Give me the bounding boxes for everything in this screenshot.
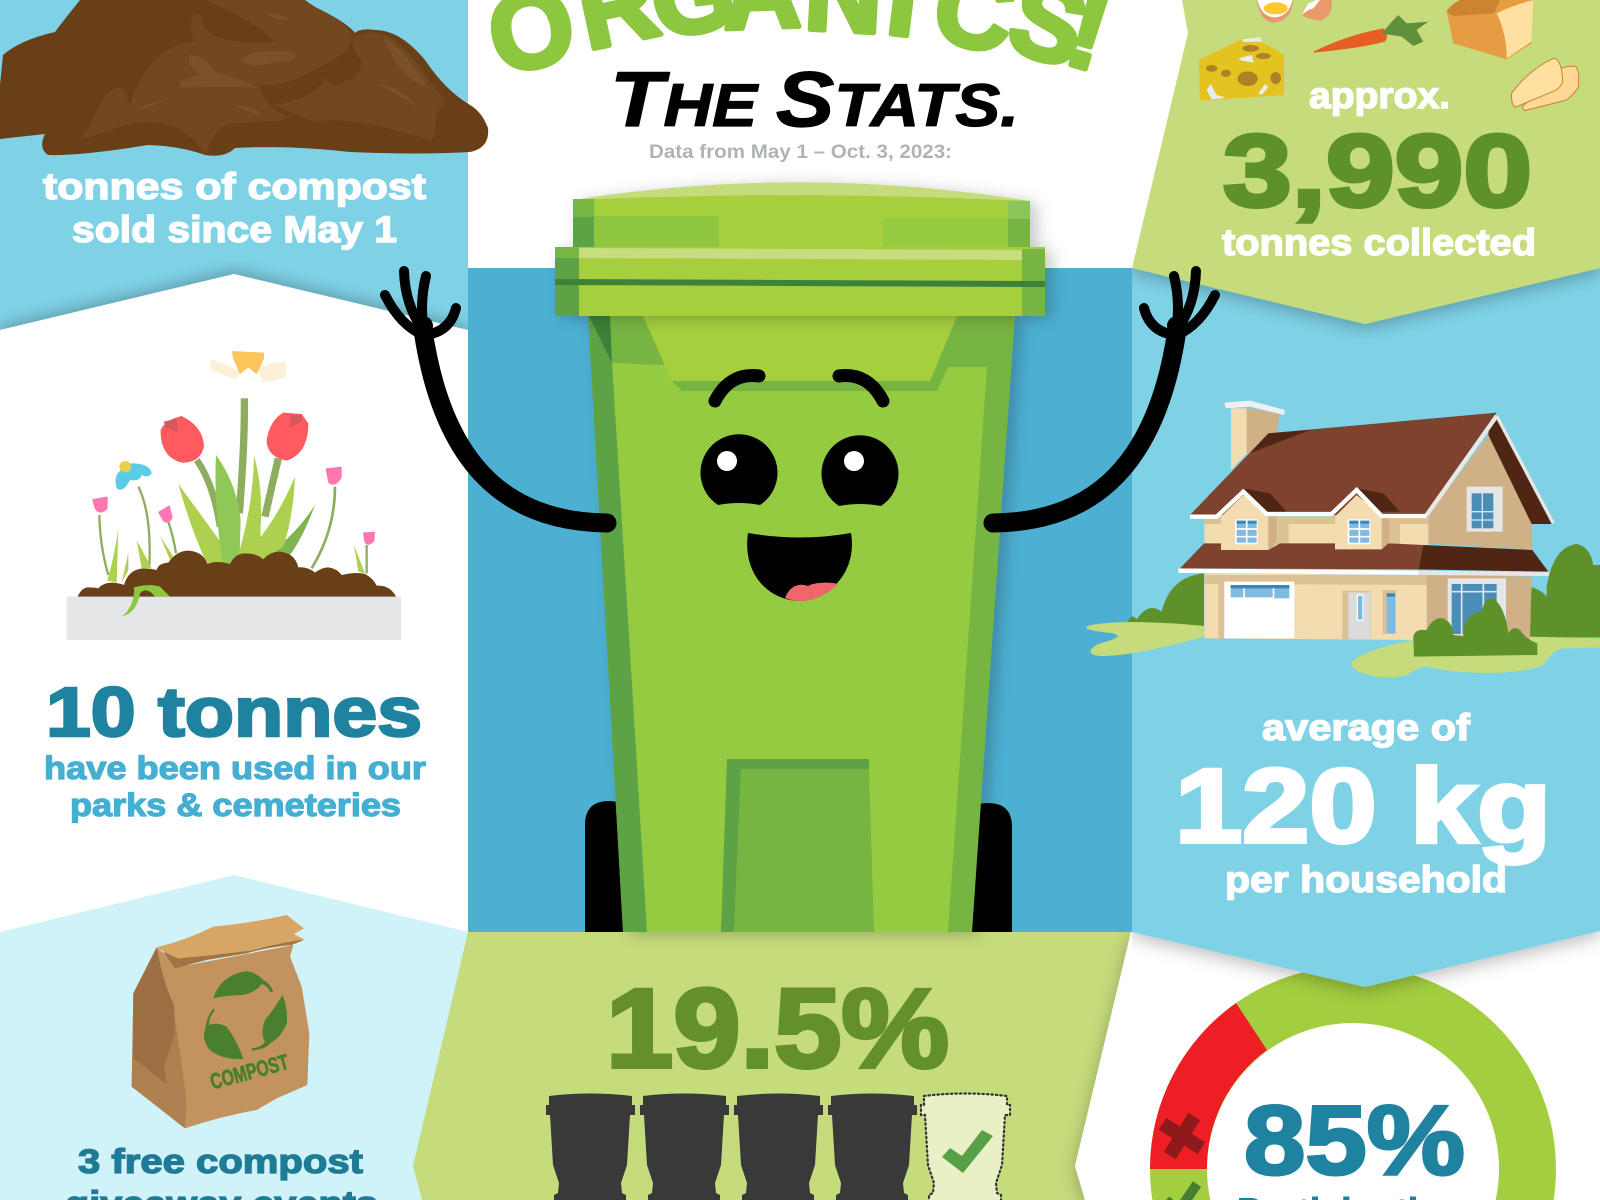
- illustration: food scraps: [1199, 0, 1579, 111]
- ground floor: [1178, 571, 1549, 640]
- bushes and lawn behind: [1086, 544, 1600, 677]
- planter box: [67, 597, 401, 640]
- text: compost label: COMPOST: [207, 1049, 292, 1094]
- panel: parks and cemeteries background: [0, 264, 468, 340]
- bin body: [588, 314, 1015, 932]
- text: tonnes of compost sold: [43, 166, 426, 250]
- pictogram: bins row: [546, 1094, 1010, 1200]
- bin door: [721, 759, 869, 932]
- dormers: [1190, 488, 1427, 550]
- eyebrows: [715, 376, 883, 401]
- front shrub: [1413, 598, 1537, 657]
- text: tonnes of compost sold: tonnes of compost: [43, 166, 426, 207]
- eye: left: [700, 434, 778, 505]
- stat: approx 3,990 tonnes collected: 3,990: [1223, 114, 1532, 228]
- wheel: right: [968, 803, 1012, 932]
- panel: central blue backdrop: [468, 268, 1132, 932]
- upper storey and roof: [1190, 413, 1553, 550]
- bin lid: [555, 182, 1045, 316]
- donut: non-participating segment: [1150, 1003, 1267, 1169]
- icon: mouldy cheese: [1199, 37, 1284, 101]
- eye: right: [821, 435, 898, 506]
- stat: 10 tonnes used in parks and cemeteries: 10 tonnes: [46, 673, 422, 751]
- stat: 19.5 percent: 19.5%: [606, 966, 949, 1091]
- mouth: [747, 533, 852, 601]
- icon: red cross: [1150, 1104, 1214, 1168]
- soil: [78, 551, 396, 597]
- bin icon 5: dotted outline: [921, 1094, 1010, 1200]
- text: data date range: Data from May 1 – Oct. 3, 2023:: [649, 142, 952, 163]
- stat: 85 percent participation: 85%: [1244, 1085, 1465, 1195]
- stat: 10 tonnes used in parks and cemeteries: have been used in our: [44, 750, 426, 786]
- illustration: compost pile: [0, 0, 488, 156]
- panel: 120 kg shadow: [1132, 931, 1600, 998]
- panel: compost sold background: [0, 0, 468, 340]
- illustration: house: [1086, 401, 1600, 677]
- stat: approx 3,990 tonnes collected: tonnes collected: [1222, 222, 1536, 263]
- wheel: left: [585, 801, 630, 932]
- text: tonnes of compost sold: sold since May 1: [72, 209, 397, 250]
- illustration: flower bed: [67, 352, 401, 640]
- bin face: [700, 376, 898, 601]
- panel: participation background: [1075, 932, 1600, 1200]
- panel: tonnes collected shadow: [1132, 268, 1600, 336]
- subtitle: The Stats: THE STATS.: [610, 55, 1019, 143]
- stat: average of 120 kg per household: 120 kg: [1175, 748, 1551, 865]
- bin icon 3: [734, 1094, 823, 1200]
- donut chart: participation: [1150, 994, 1528, 1200]
- stat: 3 free compost giveaway events: [65, 1143, 378, 1200]
- panel: giveaway events background: [0, 875, 468, 1200]
- stat: average of 120 kg per household: per household: [1225, 859, 1507, 900]
- icon: green check: [1166, 1184, 1197, 1200]
- panel: 19.5 percent background: [413, 932, 1131, 1200]
- bin icon 1: [546, 1094, 635, 1200]
- icon: carrot: [1313, 15, 1428, 53]
- flowers and leaves: [93, 352, 374, 583]
- panel: tonnes collected background: [1132, 0, 1600, 324]
- chimney: [1224, 401, 1285, 470]
- bin icon 4: [828, 1094, 917, 1200]
- stat: 3 free compost giveaway events: 3 free compost: [78, 1143, 363, 1181]
- icon: cracked egg: [1257, 0, 1332, 23]
- icon: recycling leaves: [204, 971, 287, 1059]
- icon: bread slices: [1511, 58, 1579, 111]
- illustration: compost bag: [132, 915, 309, 1128]
- lower roof: [1180, 543, 1548, 572]
- donut: participating ring: [1178, 994, 1528, 1200]
- icon: check mark: [942, 1130, 993, 1173]
- panel: 120 kg per household background: [1132, 268, 1600, 987]
- stat: average of 120 kg per household: [1175, 707, 1551, 900]
- arm: right: [993, 271, 1215, 523]
- stat: 10 tonnes used in parks and cemeteries: [44, 673, 426, 823]
- icon: bread loaf: [1447, 0, 1533, 59]
- stat: average of 120 kg per household: average of: [1262, 707, 1471, 748]
- stat: 10 tonnes used in parks and cemeteries: parks & cemeteries: [70, 787, 401, 823]
- illustration: smiling green bin: [555, 182, 1045, 932]
- stat: approx 3,990 tonnes collected: [1222, 75, 1536, 263]
- bin icon 2: [640, 1094, 729, 1200]
- arm: left: [385, 271, 607, 523]
- stat: approx 3,990 tonnes collected: approx.: [1309, 75, 1450, 116]
- worm: [122, 585, 170, 616]
